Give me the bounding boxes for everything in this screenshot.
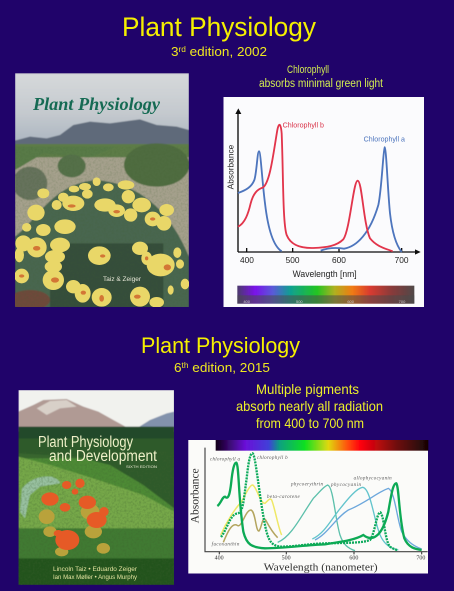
book authors: Taiz & Zeiger [103,276,142,283]
flowers: paintbrush [39,479,110,556]
curve: allophycocyanin [315,488,422,549]
curve: phycoerythrin [278,485,355,551]
pigment labels: allophycocyanin [354,477,392,482]
book authors: Lincoln Taiz • Eduardo Zeiger [53,566,138,573]
book title [38,434,158,465]
x axis ticks: 700 [395,255,409,265]
curve: beta-carotene [221,485,282,535]
spectrum bar: 400 [243,299,251,304]
x axis ticks: 700 [416,556,425,562]
book authors: Ian Max Møller • Angus Murphy [53,574,138,581]
x axis ticks [215,556,425,562]
pigment labels: phycocyanin [330,483,361,488]
x axis ticks: 600 [332,255,346,265]
title: third edition: edition, 2002 [186,44,267,59]
caption: chlorophyll: absorbs minimal green light [259,78,384,90]
curve: chlorophyll b [238,125,393,251]
caption: multiple pigments: absorb nearly all radiation [236,398,383,414]
spectrum bar: 700 [399,299,406,304]
title: third edition: rd [179,45,186,54]
caption: chlorophyll: Chlorophyll [287,64,329,76]
curve: chlorophyll a [238,147,402,252]
axes [238,112,417,252]
axes [205,448,428,554]
label: chlorophyll a: Chlorophyll a [364,136,405,143]
y axis label: Absorbance [225,144,235,189]
title: sixth edition: edition, 2015 [189,360,270,375]
book title: and Development [49,448,158,465]
x axis label: Wavelength [nm] [293,269,357,279]
caption: multiple pigments: Multiple pigments [256,381,359,397]
book title: Plant Physiology [38,434,133,451]
curve: chlorophyll b [221,453,398,550]
chart: chlorophyll absorbance [224,97,424,307]
spectrum bar: 600 [347,299,355,304]
flowers: cactus blossoms [14,177,189,308]
x axis ticks: 600 [349,556,358,562]
x axis ticks: 500 [286,255,300,265]
x axis ticks [240,255,409,265]
spectrum bar: 500 [296,299,303,304]
curve: chlorophyll a [217,463,422,550]
title: sixth edition: Plant Physiology [141,333,300,358]
pigment labels: beta-carotene [267,495,300,500]
pigment labels: phycoerythrin [290,482,323,487]
spectrum bar [216,440,428,451]
title: third edition [122,12,316,59]
title: third edition: 3 [171,44,178,59]
title: sixth edition: th [182,361,189,370]
book cover: third edition [10,73,189,310]
curve: fucoxanthin [223,510,278,542]
pigment labels: fucoxanthin [212,543,240,548]
caption: multiple pigments: from 400 to 700 nm [256,415,364,431]
pigment labels [210,456,392,548]
caption: multiple pigments [236,381,383,431]
book authors [53,566,138,581]
book edition: SIXTH EDITION [126,464,157,469]
title: sixth edition [141,333,300,375]
book title: Plant Physiology [32,94,161,114]
curve: phycocyanin [312,487,398,550]
chart: pigment absorbance [188,440,428,574]
pigment labels: chlorophyll a [210,458,240,463]
x axis ticks: 500 [282,556,291,562]
label: chlorophyll b: Chlorophyll b [283,123,324,130]
x axis ticks: 400 [240,255,254,265]
x axis ticks: 400 [215,556,224,562]
pigment labels: chlorophyll b [257,456,288,461]
caption: chlorophyll [259,64,384,90]
title: third edition: Plant Physiology [122,12,316,42]
book cover: sixth edition [18,390,174,585]
y axis label: Absorbance [189,468,201,523]
x axis label: Wavelength (nanometer) [264,563,378,574]
spectrum bar [237,286,414,304]
title: sixth edition: 6 [174,360,181,375]
